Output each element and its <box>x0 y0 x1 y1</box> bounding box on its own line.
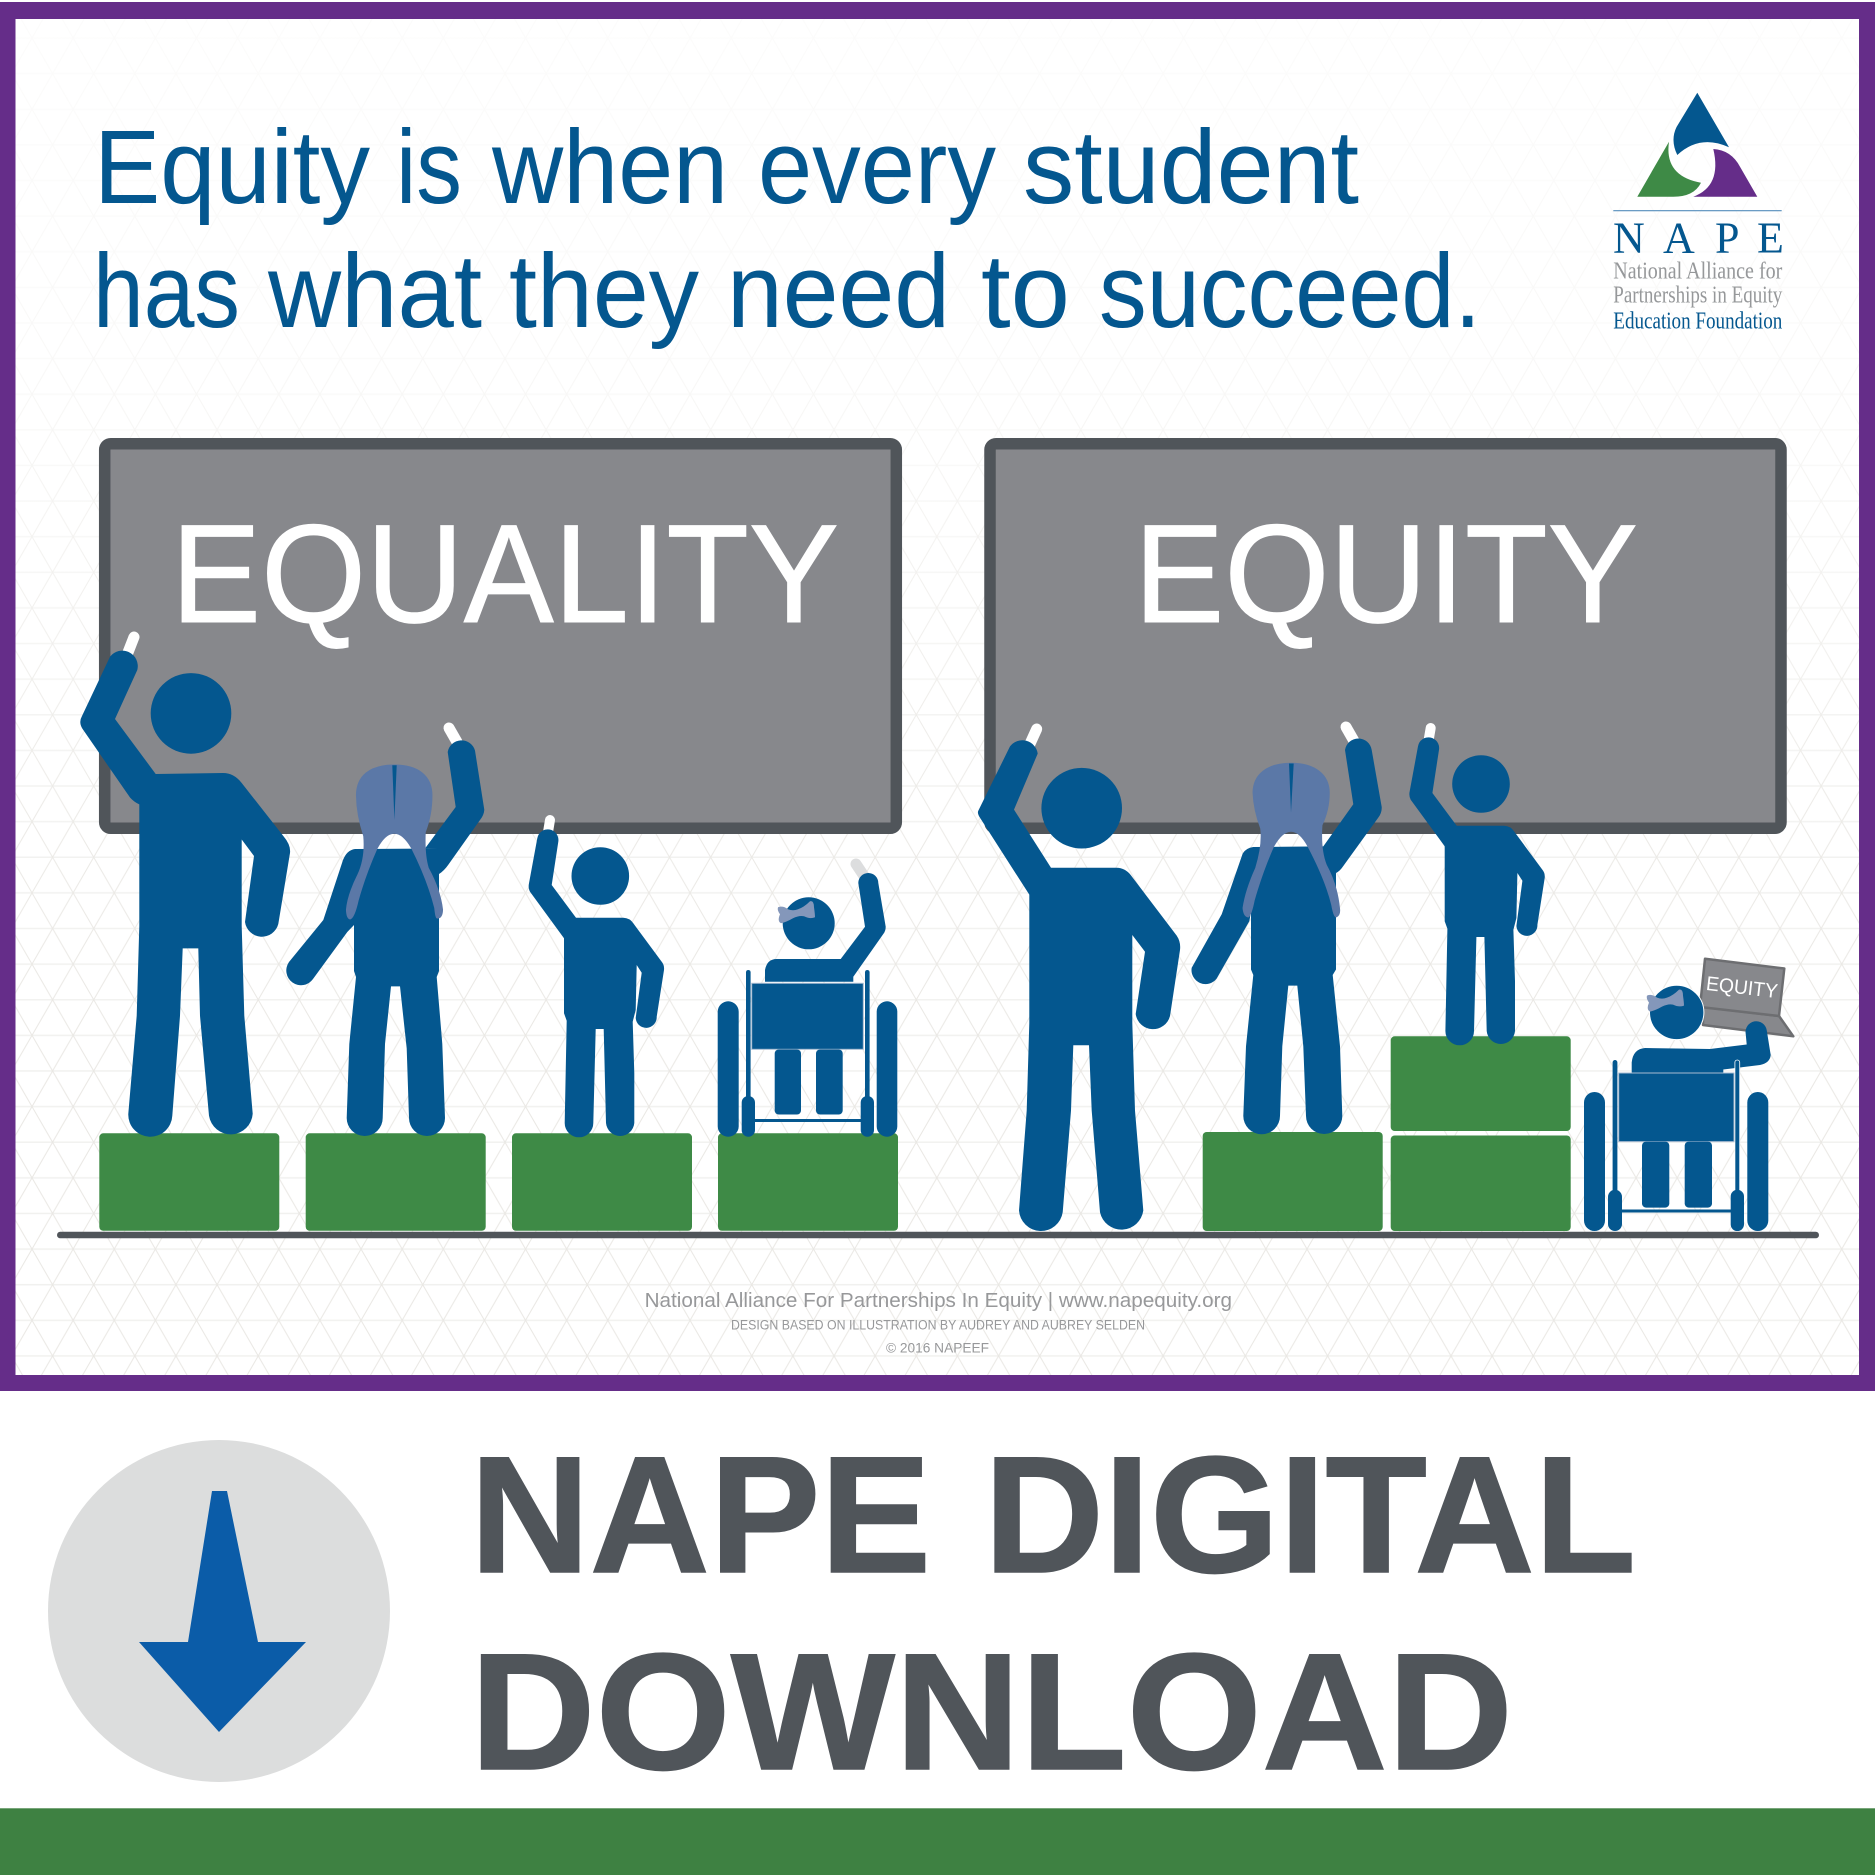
heading: NAPE Digital Download: DOWNLOAD <box>470 1620 1513 1805</box>
figure: girl in wheelchair, equality <box>718 864 897 1137</box>
wheelchair <box>718 970 897 1137</box>
footer credits: National Alliance For Partnerships In Equity | www.napequity.org <box>645 1290 1232 1312</box>
heading: NAPE Digital Download <box>470 1423 1636 1805</box>
title: Equity <box>94 109 370 226</box>
head <box>783 897 835 949</box>
title: is <box>396 109 462 226</box>
title: has <box>93 233 240 350</box>
chalk <box>856 864 864 876</box>
bow <box>1647 989 1684 1012</box>
figure: boy, equality <box>529 820 664 1137</box>
panel: equality board: EQUALITY <box>171 495 839 652</box>
panel: patterned poster background <box>15 19 1860 1376</box>
figure: girl with ponytails, equity <box>1192 727 1382 1134</box>
title: student <box>1023 109 1359 226</box>
panel: equality board <box>105 444 896 828</box>
logo mark: three-colour triangle <box>1637 93 1757 197</box>
logo wordmark: Education Foundation <box>1613 308 1782 334</box>
ground line <box>57 1232 1819 1238</box>
figure: girl with ponytails, equality <box>286 728 484 1136</box>
logo wordmark: National Alliance for <box>1613 258 1782 284</box>
heading: NAPE Digital Download: NAPE <box>470 1423 931 1608</box>
title: they <box>509 233 699 350</box>
green footer bar <box>0 1808 1875 1875</box>
upper body and arm <box>1632 1021 1771 1073</box>
panel: equity board: EQUITY <box>1134 495 1638 652</box>
logo wordmark: NAPE <box>1613 214 1784 263</box>
upper body and arm <box>765 873 886 982</box>
icon: download arrow in circle <box>48 1440 390 1782</box>
title: what <box>267 233 482 350</box>
laptop <box>1700 959 1793 1036</box>
NAPE logo <box>1613 93 1784 334</box>
figure: tall student, equality <box>80 637 290 1137</box>
bow <box>778 901 815 923</box>
green blocks <box>99 1036 1571 1231</box>
title: succeed. <box>1099 233 1481 350</box>
footer credits: DESIGN BASED ON ILLUSTRATION BY AUDREY AND AUBREY SELDEN <box>731 1318 1145 1332</box>
panel: equity board <box>990 444 1781 828</box>
footer credits <box>645 1290 1232 1356</box>
heading: NAPE Digital Download: DIGITAL <box>984 1423 1636 1608</box>
title: every <box>758 109 996 226</box>
title: need <box>727 233 950 350</box>
logo wordmark: Partnerships in Equity <box>1613 282 1782 308</box>
head <box>1650 985 1704 1040</box>
figure: girl in wheelchair with laptop, equity <box>1584 959 1793 1231</box>
figure: tall student, equity <box>978 729 1180 1231</box>
title: to <box>981 233 1070 350</box>
footer credits: © 2016 NAPEEF <box>886 1340 989 1356</box>
figure: boy on stacked blocks, equity <box>1409 728 1545 1045</box>
logo wordmark <box>1613 214 1784 334</box>
title: when <box>491 109 728 226</box>
title <box>93 109 1481 350</box>
purple poster frame <box>0 2 1875 1391</box>
wheelchair <box>1584 1060 1768 1231</box>
laptop: EQUITY <box>1705 973 1779 1003</box>
